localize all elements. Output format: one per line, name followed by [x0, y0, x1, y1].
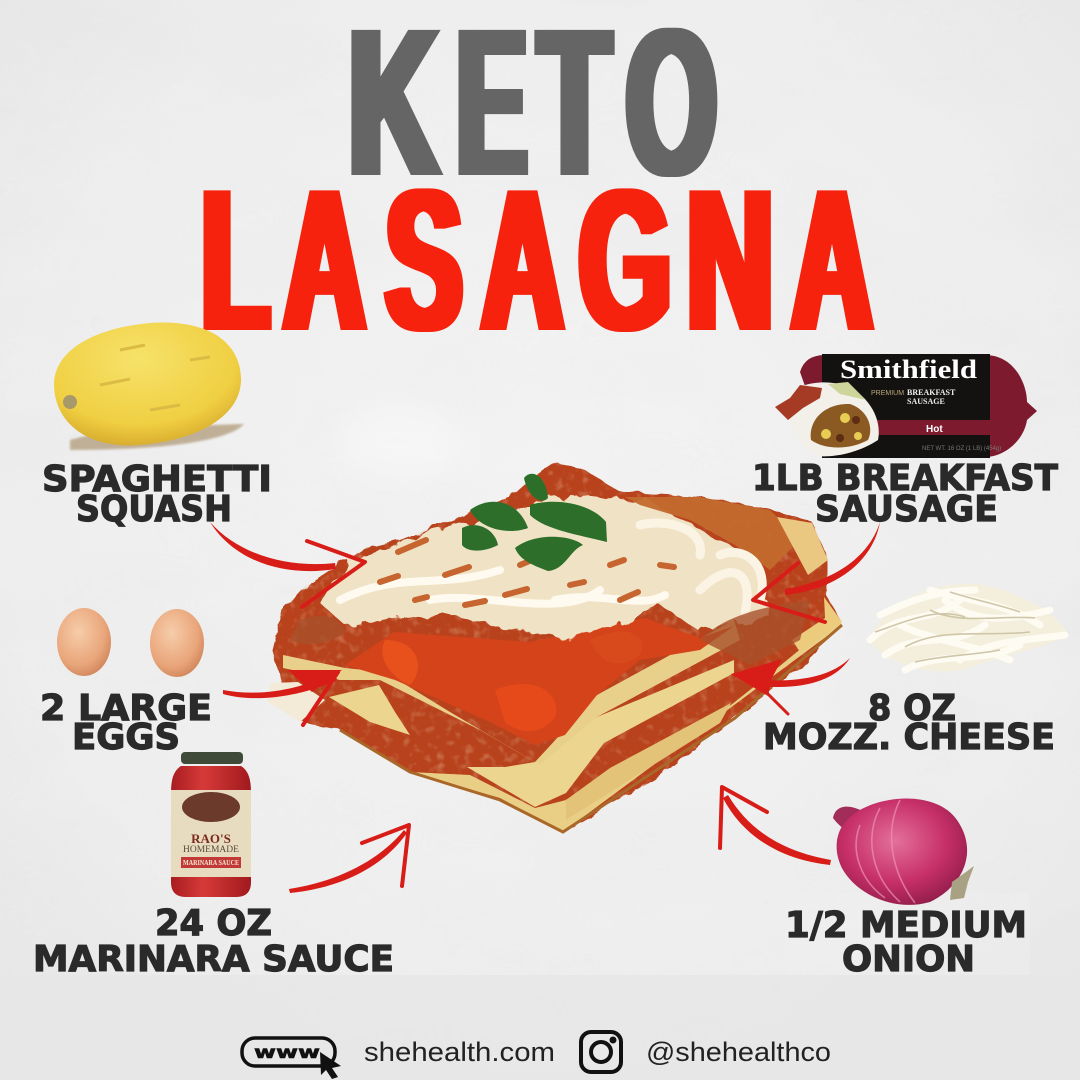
icon: marinara sauce jar: HOMEMADE [183, 845, 239, 855]
label: marinara sauce: 24 OZ [155, 903, 272, 944]
icon: parsley [462, 474, 607, 571]
label: spaghetti squash: SQUASH [76, 489, 232, 530]
label: medium onion [785, 905, 1027, 980]
label: spaghetti squash: SPAGHETTI [42, 459, 272, 500]
icon: smithfield sausage: BREAKFAST [907, 388, 956, 397]
label: mozzarella cheese [763, 688, 1055, 758]
icon: smithfield sausage: NET WT. 16 OZ (1 LB) (454g) [922, 446, 1001, 452]
label: breakfast sausage: 1LB BREAKFAST [752, 458, 1058, 499]
title: LASAGNA [202, 149, 872, 372]
icon: smithfield sausage: SAUSAGE [907, 397, 945, 406]
title: LASAGNA: N [687, 149, 773, 372]
arrow: eggs to lasagna [223, 670, 342, 725]
illustration: lasagna [260, 455, 850, 835]
icon: smithfield sausage: Smithfield [840, 355, 978, 384]
icon: smithfield sausage: PREMIUM [871, 390, 904, 397]
icon: www cursor [242, 1038, 341, 1079]
footer: website [242, 1037, 555, 1079]
title: LASAGNA: A [284, 149, 365, 372]
arrow: mozzarella to lasagna [731, 658, 850, 714]
arrow: sausage to lasagna [753, 522, 880, 622]
icon: instagram [581, 1032, 621, 1072]
footer: website: shehealth.com [364, 1037, 555, 1067]
arrow: squash to lasagna [210, 522, 365, 607]
title: LASAGNA: G [579, 149, 671, 372]
title: LASAGNA: S [386, 149, 462, 372]
icon: mozzarella cheese [868, 584, 1068, 671]
title: LASAGNA: L [202, 149, 270, 372]
footer: instagram: @shehealthco [646, 1037, 831, 1067]
label: mozzarella cheese: MOZZ. CHEESE [763, 717, 1055, 758]
label: breakfast sausage [752, 458, 1058, 530]
icon: marinara sauce jar: RAO'S [191, 831, 231, 846]
title: LASAGNA: A [792, 149, 872, 372]
label: marinara sauce [33, 903, 394, 980]
label: breakfast sausage: SAUSAGE [815, 489, 998, 530]
label: mozzarella cheese: 8 OZ [868, 688, 956, 729]
label: large eggs [40, 688, 212, 758]
label: large eggs: EGGS [72, 717, 180, 758]
icon: marinara sauce jar: MARINARA SAUCE [183, 859, 239, 867]
label: medium onion: ONION [842, 939, 975, 980]
arrow: marinara to lasagna [289, 825, 409, 893]
title: LASAGNA: A [482, 149, 563, 372]
title: KETO [349, 0, 717, 219]
arrow: onion to lasagna [720, 787, 831, 865]
label: spaghetti squash [42, 459, 272, 530]
icon: smithfield sausage [775, 354, 1037, 458]
icon: red onion [833, 799, 974, 905]
icon: smithfield sausage: Hot [926, 424, 943, 435]
icon: eggs [57, 608, 204, 677]
footer: instagram [581, 1032, 831, 1072]
label: medium onion: 1/2 MEDIUM [785, 905, 1027, 946]
icon: spaghetti squash [54, 323, 244, 450]
label: marinara sauce: MARINARA SAUCE [33, 939, 394, 980]
icon: www cursor: www [254, 1043, 320, 1063]
label: large eggs: 2 LARGE [40, 688, 212, 729]
icon: marinara sauce jar [171, 752, 251, 897]
